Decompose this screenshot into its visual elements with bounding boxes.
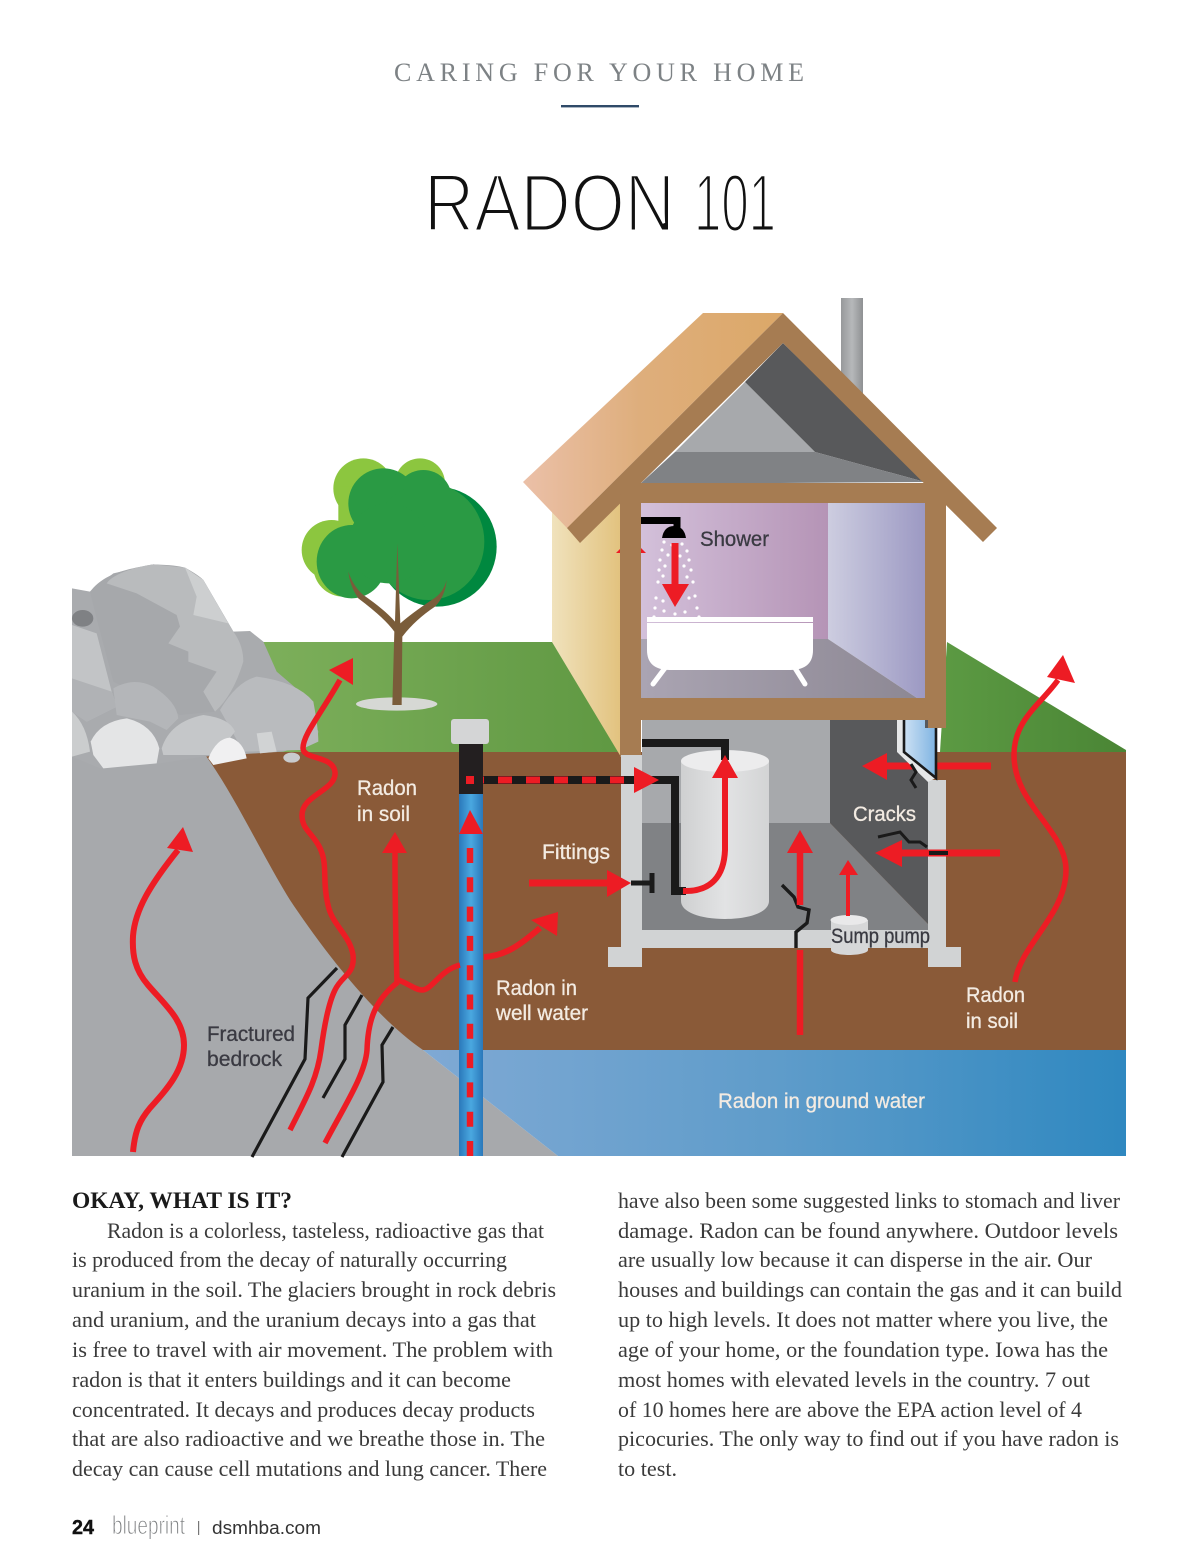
white rock big: [91, 718, 159, 768]
grass right: [940, 642, 1126, 752]
bathtub: [647, 617, 813, 684]
fittings arrow: [529, 870, 631, 897]
attic floor: [640, 452, 925, 484]
label radon in soil right: [966, 984, 1025, 1033]
boulder highlight: [185, 568, 228, 623]
room back wall: [641, 503, 828, 640]
window: [897, 720, 936, 782]
article right column: have also been some suggested links to stomach and liver: [618, 1188, 1121, 1213]
pebble: [283, 753, 300, 763]
basement back wall: [642, 720, 830, 824]
label ground water: Radon in ground water: [718, 1090, 925, 1113]
label cracks: Cracks: [853, 803, 916, 826]
crack floor: [782, 885, 809, 948]
left body text: concentrated. It decays and produces decay products: [72, 1397, 535, 1422]
article right column: up to high levels. It does not matter where you live, the: [618, 1307, 1108, 1332]
right soil arrow: [1014, 655, 1075, 982]
article right column: damage. Radon can be found anywhere. Outdoor levels: [618, 1218, 1118, 1243]
labels: [207, 777, 1025, 1113]
label radon in soil right: Radon: [966, 984, 1025, 1007]
well cap: [451, 719, 489, 744]
room side wall: [828, 503, 925, 698]
title: RADON: [424, 158, 675, 249]
left body text: that are also radioactive and we breathe those in. The: [72, 1426, 545, 1451]
crack window: [911, 764, 916, 788]
branching arrow: [325, 832, 558, 1143]
radon diagram: [72, 298, 1126, 1157]
well red square: [466, 776, 474, 784]
sump pump: [830, 915, 868, 955]
crack wall upper: [878, 832, 927, 847]
well arrowhead: [459, 810, 483, 834]
wall penetration: [929, 851, 948, 855]
well head: [459, 743, 483, 794]
house: [523, 313, 997, 757]
article right column: age of your home, or the foundation type. Iowa has the: [618, 1337, 1108, 1362]
shower head: [662, 526, 686, 538]
roof slope: [523, 313, 783, 528]
left body text: and uranium, and the uranium decays into a gas that: [72, 1307, 536, 1332]
well: [451, 719, 489, 1156]
label radon in well water: well water: [495, 1002, 588, 1025]
title: 101: [694, 158, 776, 249]
well dashes: [467, 845, 473, 1156]
foundation: [608, 755, 961, 967]
article right column: picocuries. The only way to find out if you have radon is: [618, 1426, 1119, 1451]
label radon in soil left: Radon: [357, 777, 417, 800]
side wall: [552, 500, 621, 757]
shower pipe: [641, 520, 677, 530]
article right column: are usually low because it can disperse in the air. Our: [618, 1247, 1093, 1272]
pipe arrowhead: [634, 767, 659, 793]
basement floor: [642, 823, 928, 932]
center arrow: [787, 830, 813, 1035]
article right column: houses and buildings can contain the gas and it can build: [618, 1277, 1122, 1302]
left body text: is free to travel with air movement. The problem with: [72, 1337, 553, 1362]
basement side wall: [830, 720, 928, 924]
attic side wall: [745, 343, 925, 482]
sump arrow: [839, 860, 858, 916]
separator: [198, 1521, 199, 1535]
fractures: [252, 968, 393, 1157]
label sump pump: Sump pump: [831, 925, 930, 948]
article right column: of 10 homes here are above the EPA action level of 4: [618, 1397, 1082, 1422]
label fractured bedrock: Fractured: [207, 1023, 295, 1046]
label radon in soil left: [357, 777, 417, 826]
shower label: Shower: [700, 528, 769, 551]
small stone: [257, 732, 277, 753]
hidden arrow tip: [616, 538, 646, 553]
dark canopy back: [377, 487, 497, 607]
lower pipe: [640, 780, 686, 891]
website: dsmhba.com: [212, 1518, 321, 1538]
dark canopy: [317, 468, 484, 600]
left low rock: [72, 712, 90, 757]
ground water: [423, 1050, 1126, 1156]
left body text: radon is that it enters buildings and it can become: [72, 1367, 511, 1392]
article left column: [72, 1188, 556, 1481]
label radon in soil left: in soil: [357, 803, 410, 826]
well line: [470, 776, 640, 784]
light canopy: [302, 458, 445, 597]
upper pipe: [642, 743, 725, 760]
left body text: uranium in the soil. The glaciers brought in rock debris: [72, 1277, 556, 1302]
rock silhouette: [72, 564, 318, 768]
white rock small: [208, 738, 247, 765]
water tank: [681, 750, 769, 919]
left body text: decay can cause cell mutations and lung cancer. There: [72, 1456, 547, 1481]
middle rock: [113, 682, 178, 730]
soil wiggle arrow: [290, 658, 353, 1130]
right rock: [220, 677, 318, 752]
article right column: [618, 1188, 1122, 1481]
publication name: blueprint: [112, 1510, 186, 1540]
label fractured bedrock: [207, 1023, 295, 1071]
label fractured bedrock: bedrock: [207, 1048, 282, 1071]
attic back wall: [675, 382, 815, 452]
cracks arrow lower: [875, 840, 1000, 867]
article heading: OKAY, WHAT IS IT?: [72, 1188, 292, 1213]
label radon in well water: Radon in: [496, 977, 577, 1000]
boulder light facet: [107, 564, 243, 712]
cracks arrow top: [862, 753, 991, 780]
left body text: [72, 1218, 556, 1481]
article right column: to test.: [618, 1456, 677, 1481]
grass left: [200, 642, 622, 752]
tree: [302, 458, 497, 711]
pipe t fitting: [631, 873, 652, 893]
trunk: [348, 543, 447, 705]
low center rock: [162, 715, 235, 755]
tank arrow: [683, 755, 738, 891]
section label: CARING FOR YOUR HOME: [394, 58, 804, 87]
bedrock arrow: [133, 827, 193, 1152]
label radon in well water: [495, 977, 588, 1025]
house frame: [620, 483, 946, 757]
ground shadow: [356, 697, 437, 711]
left rock lower: [72, 678, 117, 722]
label radon in soil right: in soil: [966, 1010, 1018, 1033]
bedrock: [72, 752, 558, 1156]
shower spray: [652, 540, 701, 619]
header rule: [561, 105, 639, 107]
basement: [470, 720, 1000, 1035]
soil: [200, 752, 1126, 1050]
roof frame: [567, 313, 997, 543]
left rock: [72, 625, 117, 722]
shower arrow: [662, 543, 689, 607]
dark hollow: [72, 610, 93, 627]
rocks: [72, 564, 318, 768]
room floor: [641, 639, 917, 698]
main boulder: [90, 564, 243, 715]
page number: 24: [72, 1517, 95, 1539]
left body text: Radon is a colorless, tasteless, radioactive gas that: [107, 1218, 544, 1243]
footer: [72, 1510, 321, 1540]
article right column: most homes with elevated levels in the country. 7 out: [618, 1367, 1090, 1392]
well pipe: [459, 793, 483, 1156]
chimney: [841, 298, 863, 402]
radon dashes in pipe: [470, 776, 636, 784]
left body text: is produced from the decay of naturally occurring: [72, 1247, 507, 1272]
label fittings: Fittings: [542, 841, 610, 864]
